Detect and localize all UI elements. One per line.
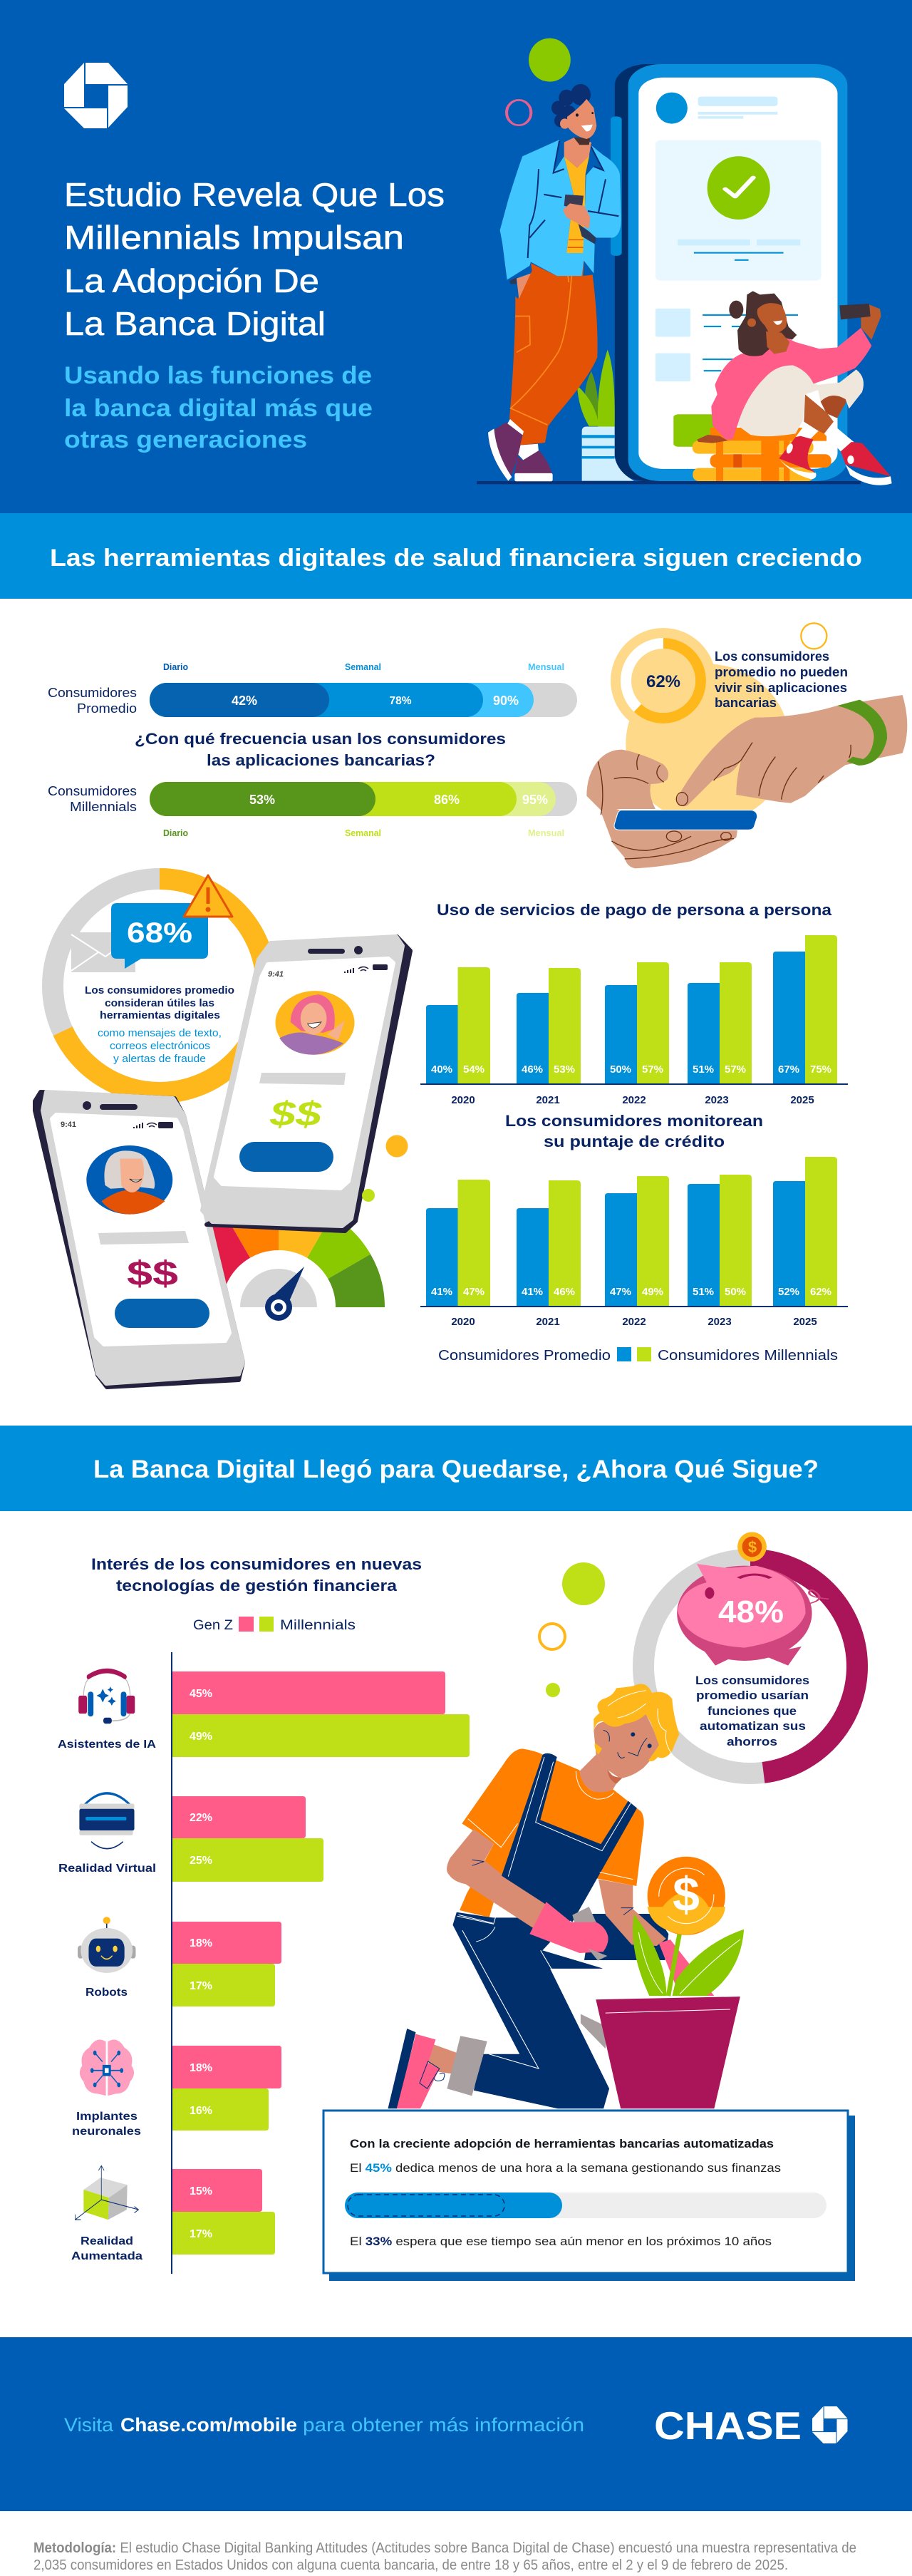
illustration: man with plant [488, 84, 634, 481]
text: call to action: Chase.com/mobile [120, 2414, 297, 2436]
bar chart: person to person payments: 2022 [622, 1094, 646, 1106]
label: augmented reality [71, 2235, 142, 2262]
icon: neural implant brain [80, 2040, 134, 2096]
illustration: banking phone [477, 38, 861, 484]
bar: average consumers usage: Semanal [345, 661, 381, 672]
icon: virtual reality headset [79, 1793, 135, 1849]
bar: average consumers usage: Mensual [528, 661, 564, 672]
text: digital tools statement: Los consumidores promedio [85, 984, 234, 996]
callout: automated banking tools [323, 2111, 855, 2281]
bar: millennial consumers usage: 53% [249, 793, 275, 807]
bar: millennial consumers usage [48, 782, 577, 838]
bar: average consumers usage: 78% [389, 695, 412, 707]
heading: credit score monitoring: su puntaje de crédito [544, 1133, 725, 1150]
speech bubble: 68% [111, 903, 208, 969]
heading: interest in new technologies: Interés de los consumidores en nuevas [91, 1555, 422, 1573]
text: digital tools examples: como mensajes de texto, [98, 1027, 222, 1039]
bar chart: credit score monitoring: 41% [431, 1286, 452, 1298]
torso, bib, arm, head [447, 1684, 679, 1953]
icon: Chase octagon logo [812, 2406, 847, 2443]
donut chart: 48% piggy bank: 48% [718, 1594, 784, 1629]
bar chart: credit score monitoring: 2023 [708, 1316, 732, 1328]
illustration: right phone [202, 937, 410, 1231]
bar chart: technology interest: 25% [190, 1855, 212, 1867]
bar chart: credit score monitoring: 52% [778, 1286, 799, 1298]
bar chart: person to person payments: 2023 [705, 1094, 729, 1106]
bar chart: person to person payments: 2021 [536, 1094, 560, 1106]
bar chart: credit score monitoring: 41% [522, 1286, 543, 1298]
text: digital tools examples: y alertas de fraude [113, 1053, 206, 1065]
bar chart: technology interest: 45% [190, 1688, 212, 1700]
text: methodology: Metodología: El estudio Chase Digital Banking Attitudes (Actitudes sobre Banca Digital de Chase) encuestó una muestra representativa de [33, 2540, 856, 2556]
bar chart: credit score monitoring: 2022 [622, 1316, 646, 1328]
bar chart: credit score monitoring [420, 1157, 848, 1328]
icon: augmented reality cube [75, 2165, 138, 2220]
donut chart: 62%: 62% [646, 672, 680, 691]
progress bar: 45% [345, 2193, 826, 2218]
donut chart: 48% piggy bank: $ [748, 1538, 757, 1556]
heading band: what's next [0, 1426, 912, 1511]
panel: footer [0, 2337, 912, 2511]
trowel, pot, coin flower [589, 1857, 744, 2108]
callout: automated banking tools: El 33% espera que ese tiempo sea aún menor en los próximos 10 años [350, 2235, 772, 2248]
bar chart: credit score monitoring: 49% [642, 1286, 663, 1298]
text: digital tools statement [85, 984, 234, 1021]
heading: credit score monitoring: Los consumidores monitorean [505, 1112, 763, 1130]
bar chart: technology interest: 18% [190, 2062, 212, 2074]
bar chart: credit score monitoring: 2021 [536, 1316, 560, 1328]
bar chart: credit score monitoring: 47% [610, 1286, 631, 1298]
icon: robot [78, 1917, 135, 1973]
bar: millennial consumers usage: 86% [434, 793, 460, 807]
bar chart: credit score monitoring: 2020 [451, 1316, 475, 1328]
heading: usage frequency question: ¿Con qué frecuencia usan los consumidores [135, 730, 506, 748]
chart legend: consumer groups: Consumidores Millennials [658, 1348, 838, 1364]
bar: average consumers usage: 90% [493, 694, 519, 708]
heading: usage frequency question [135, 730, 506, 769]
callout: cannot live without banking apps: bancarias [715, 696, 777, 710]
bar chart: person to person payments: 46% [522, 1063, 543, 1076]
illustration: left phone [35, 1092, 243, 1387]
illustration: gardener with money plant [388, 1684, 744, 2108]
bar chart: credit score monitoring: 47% [463, 1286, 484, 1298]
bar: millennial consumers usage: Consumidores [48, 783, 137, 798]
illustration: hands tapping phone [586, 623, 907, 868]
bar chart: technology interest: 49% [190, 1731, 212, 1743]
bar chart: credit score monitoring: 62% [810, 1286, 831, 1298]
text: call to action: para obtener más información [303, 2414, 584, 2436]
bar chart: credit score monitoring: 2025 [793, 1316, 817, 1328]
bar: millennial consumers usage: Diario [163, 828, 188, 838]
label: AI assistants: Asistentes de IA [58, 1738, 156, 1751]
heading: interest in new technologies [91, 1555, 422, 1594]
bar chart: person to person payments: 75% [810, 1063, 831, 1076]
title: La Adopción De [64, 262, 319, 299]
label: robots: Robots [86, 1987, 128, 1999]
text: automate savings statement: ahorros [727, 1735, 777, 1748]
bar: millennial consumers usage: Millennials [70, 799, 137, 814]
callout: automated banking tools: El 45% dedica menos de una hora a la semana gestionando sus finanzas [350, 2161, 781, 2175]
icon: dollar sign on flower: $ [673, 1867, 700, 1922]
legs, pot and plant [388, 1912, 714, 2108]
heading band: digital tools: Las herramientas digitales de salud financiera siguen creciendo [50, 545, 862, 572]
chart legend: Gen Z and Millennials: Millennials [280, 1618, 356, 1633]
illustration: left phone: $$ [127, 1255, 178, 1293]
bar chart: credit score monitoring: 50% [725, 1286, 746, 1298]
subtitle: Usando las funciones de [64, 362, 372, 389]
speech bubble: 68%: 68% [127, 917, 192, 949]
bar chart: technology interest: 18% [190, 1937, 212, 1949]
bar: millennial consumers usage: 95% [522, 793, 548, 807]
decorative dots [362, 1135, 408, 1202]
bar chart: person to person payments: 53% [554, 1063, 575, 1076]
bar chart: technology interest: 22% [190, 1812, 212, 1824]
donut chart: 68% useful digital tools [53, 875, 266, 1093]
avatar: young woman [276, 991, 355, 1055]
bar chart: technology interest [171, 1652, 470, 2274]
icon: envelope [71, 932, 135, 972]
bar chart: credit score monitoring: 46% [554, 1286, 575, 1298]
illustration: right phone: $$ [269, 1096, 323, 1133]
bar chart: person to person payments: 51% [693, 1063, 714, 1076]
heading band: what's next: La Banca Digital Llegó para Quedarse, ¿Ahora Qué Sigue? [93, 1456, 819, 1483]
donut chart: 48% piggy bank [643, 1532, 857, 1773]
text: call to action: Visita [64, 2414, 114, 2436]
label: neural implants [72, 2111, 141, 2138]
heading: person to person payments: Uso de servicios de pago de persona a persona [437, 901, 832, 919]
illustration: left phone: 9:41 [61, 1120, 76, 1129]
text: methodology [33, 2540, 856, 2573]
donut chart: 62% [611, 628, 716, 733]
avatar: older woman [86, 1145, 172, 1215]
label: neural implants: Implantes [76, 2111, 138, 2123]
text: automate savings statement: Los consumidores [695, 1674, 809, 1687]
subtitle: otras generaciones [64, 426, 307, 453]
text: automate savings statement: promedio usarían [696, 1689, 809, 1702]
label: virtual reality: Realidad Virtual [58, 1863, 156, 1875]
heading: usage frequency question: las aplicaciones bancarias? [207, 751, 435, 769]
callout: cannot live without banking apps: Los consumidores [715, 649, 829, 664]
label: neural implants: neuronales [72, 2126, 141, 2138]
text: digital tools examples: correos electrónicos [110, 1040, 210, 1052]
bar: average consumers usage: 42% [232, 694, 257, 708]
bar: millennial consumers usage: Semanal [345, 828, 381, 838]
title: Millennials Impulsan [64, 219, 404, 256]
label: augmented reality: Realidad [81, 2235, 133, 2247]
bar chart: person to person payments: 67% [778, 1063, 799, 1076]
bar: average consumers usage [48, 661, 577, 717]
bar chart: person to person payments: 2025 [790, 1094, 814, 1106]
chart legend: Gen Z and Millennials [193, 1617, 356, 1633]
gauge: credit score [172, 1201, 385, 1321]
bar: average consumers usage: Promedio [77, 701, 137, 716]
illustration: right phone: 9:41 [268, 970, 284, 979]
text: automate savings statement: automatizan sus [700, 1719, 806, 1733]
logo: CHASE wordmark: CHASE [654, 2404, 802, 2448]
bar chart: credit score monitoring: 51% [693, 1286, 714, 1298]
chart legend: consumer groups: Consumidores Promedio [438, 1348, 611, 1364]
icon: Chase octagon logo [64, 63, 128, 128]
bar: average consumers usage: Diario [163, 661, 188, 672]
title: La Banca Digital [64, 305, 326, 342]
rear leg, back arm [460, 1748, 668, 1960]
heading band: digital tools [0, 513, 912, 599]
text: call to action [64, 2414, 584, 2436]
callout: automated banking tools: Con la creciente adopción de herramientas bancarias automatizadas [350, 2137, 774, 2150]
label: augmented reality: Aumentada [71, 2250, 142, 2262]
bar chart: person to person payments: 50% [610, 1063, 631, 1076]
bar chart: person to person payments: 40% [431, 1063, 452, 1076]
bar chart: person to person payments: 54% [463, 1063, 484, 1076]
decorative circles [539, 1562, 605, 1697]
text: digital tools statement: herramientas digitales [100, 1009, 220, 1021]
chart legend: Gen Z and Millennials: Gen Z [193, 1618, 233, 1633]
bar chart: technology interest: 15% [190, 2185, 212, 2198]
bar chart: person to person payments: 2020 [451, 1094, 475, 1106]
bar: average consumers usage: Consumidores [48, 685, 137, 700]
title [64, 176, 445, 342]
panel: header [0, 0, 912, 513]
callout: cannot live without banking apps: vivir sin aplicaciones [715, 681, 847, 695]
heading: interest in new technologies: tecnologías de gestión financiera [116, 1577, 398, 1594]
bar: millennial consumers usage: Mensual [528, 828, 564, 838]
icon: piggy bank and coin [677, 1532, 829, 1666]
bar chart: person to person payments: 57% [642, 1063, 663, 1076]
subtitle [64, 362, 373, 453]
icon: warning triangle [184, 875, 232, 917]
text: digital tools statement: consideran útiles las [105, 997, 214, 1009]
title: Estudio Revela Que Los [64, 176, 445, 213]
subtitle: la banca digital más que [64, 395, 373, 422]
callout: cannot live without banking apps [715, 649, 848, 710]
heading: credit score monitoring [505, 1112, 763, 1150]
bar chart: person to person payments [420, 935, 848, 1106]
bar chart: technology interest: 17% [190, 1980, 212, 1992]
bar chart: technology interest: 16% [190, 2105, 212, 2117]
bar chart: technology interest: 17% [190, 2228, 212, 2240]
icon: AI headset [78, 1671, 135, 1724]
illustration: woman on coins taking selfie [693, 291, 892, 485]
callout: cannot live without banking apps: promedio no pueden [715, 665, 848, 679]
text: automate savings statement: funciones que [708, 1704, 797, 1718]
text: digital tools examples [98, 1027, 222, 1065]
bar chart: person to person payments: 57% [725, 1063, 746, 1076]
text: methodology: 2,035 consumidores en Estados Unidos con alguna cuenta bancaria, de entre 18 y 65 años, entre el 2 y el 9 de febrero de 2025. [33, 2557, 788, 2573]
chart legend: consumer groups [438, 1347, 838, 1364]
text: automate savings statement [695, 1674, 809, 1748]
